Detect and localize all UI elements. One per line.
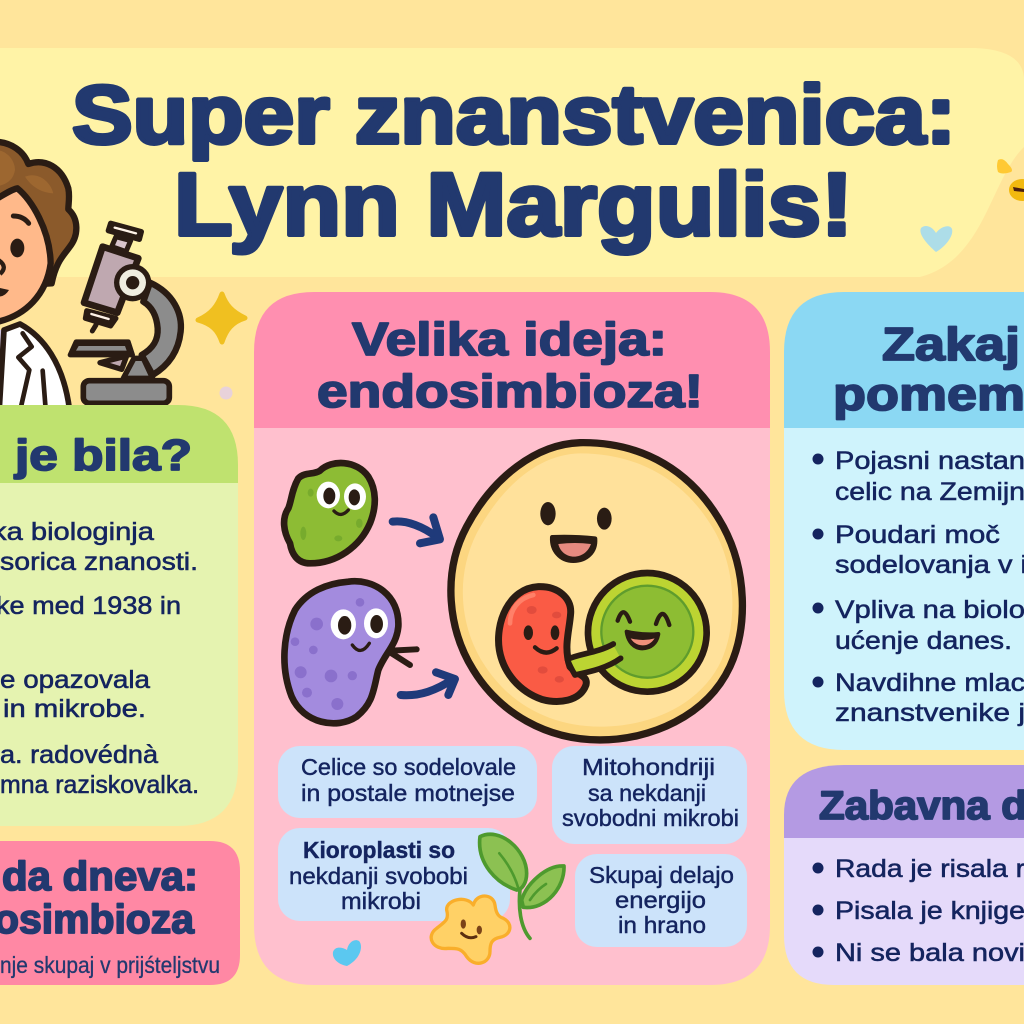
heading (0, 853, 198, 942)
panel header (0, 405, 238, 483)
heading: pomem (833, 368, 1024, 420)
label: mitochondria: svobodni mikrobi (562, 805, 739, 831)
panel body (784, 428, 1024, 750)
label: cooperation (278, 746, 537, 818)
panel header (254, 292, 770, 428)
label: mitochondria (552, 746, 747, 844)
eyepiece neck (112, 237, 131, 252)
organelles inside cell (499, 573, 707, 701)
heading (833, 318, 1024, 420)
heading: osimbioza (0, 896, 195, 942)
label: chloroplasts: mikrobi (341, 888, 421, 914)
facts list: mna raziskovalka. (0, 771, 199, 799)
endosymbiosis diagram (284, 443, 742, 740)
label: chloroplasts (278, 828, 510, 921)
title: Super znanstvenica: (72, 68, 956, 161)
facts list: sorica znanosti. (0, 548, 198, 576)
panel: word of the day (0, 841, 240, 985)
panel: fun facts (784, 765, 1024, 985)
label: energy and food: Skupaj delajo (589, 862, 734, 888)
panel body (254, 428, 770, 985)
fun facts list: Pisala je knjige (835, 897, 1024, 925)
reasons list: Pojasni nastan (835, 447, 1024, 475)
reasons list: znanstvenike j (835, 699, 1024, 727)
icon: blue heart (333, 940, 361, 966)
title (72, 68, 956, 254)
label: chloroplasts: Kioroplasti so (303, 837, 455, 863)
panel header (784, 765, 1024, 838)
purple microbe (284, 581, 417, 723)
facts list (0, 518, 199, 799)
objective lens (85, 311, 116, 326)
heading: Velika ideja: (352, 313, 667, 365)
eye and eyebrow (0, 216, 29, 297)
icon: smiling flower (431, 896, 510, 963)
stage (70, 342, 133, 355)
reasons list: Poudari moč (835, 521, 1000, 549)
lower stage (100, 356, 127, 369)
base (83, 381, 169, 403)
panel: big idea (254, 292, 770, 985)
facts list: a. radovédnà (0, 741, 158, 769)
panel: why important (784, 292, 1024, 750)
arrow: purple microbe into cell (401, 672, 455, 695)
label: mitochondria: Mitohondriji (582, 754, 715, 780)
label: mitochondria: sa nekdanji (588, 780, 706, 806)
facts list: in mikrobe. (3, 695, 146, 723)
facts list: e opazovala (0, 666, 150, 694)
reasons list (812, 447, 1024, 727)
fun facts list (812, 855, 1024, 967)
face (0, 188, 51, 323)
red mitochondrion (499, 587, 586, 701)
scientist illustration (0, 142, 76, 408)
decorative dot (220, 386, 232, 400)
panel body (0, 483, 238, 826)
hair (0, 142, 76, 287)
panel: who was she (0, 405, 238, 826)
label: energy and food: in hrano (618, 912, 706, 938)
heading (317, 313, 703, 417)
green chloroplast (588, 573, 707, 692)
label: chloroplasts: nekdanji svobobi (289, 863, 468, 889)
fun facts list: Rada je risala r (835, 855, 1024, 883)
green microbe (284, 463, 375, 563)
microscope arm (142, 283, 181, 375)
host cell (451, 443, 742, 740)
eyepiece cap (108, 223, 141, 239)
icon: sprout (480, 834, 564, 938)
reasons list: celic na Zemijn (835, 478, 1024, 506)
heading: je bila? (14, 431, 192, 480)
label: energy and food: energijo (615, 887, 706, 913)
reasons list: Vpliva na biolo (835, 596, 1024, 624)
microscope illustration (70, 223, 181, 403)
title banner (0, 48, 1024, 277)
tube (84, 247, 138, 313)
focus knob (114, 264, 151, 301)
fun facts list: Ni se bala novi (835, 939, 1024, 967)
reasons list: ućenje danes. (835, 627, 1012, 655)
label: energy and food (575, 854, 747, 947)
reasons list: Navdihne mlac (835, 669, 1024, 697)
caption: nje skupaj v prijśteljstvu (0, 952, 220, 978)
title: Lynn Margulis! (174, 154, 853, 254)
heading: da dneva: (2, 853, 198, 899)
facts list: ke med 1938 in (0, 592, 181, 620)
heading: Zakaj (882, 318, 1020, 370)
stand (123, 358, 153, 378)
label: cooperation: Celice so sodelovale (301, 754, 516, 780)
icon: small chick at right edge (997, 159, 1024, 201)
arrow: green microbe into cell (393, 517, 440, 543)
label: cooperation: in postale motnejse (301, 780, 515, 806)
coat lapel (18, 333, 45, 408)
lab coat (0, 324, 69, 408)
heading: Zabavna d (819, 784, 1024, 828)
arm linking organelles (567, 644, 621, 675)
panel header (784, 292, 1024, 428)
panel body (784, 838, 1024, 985)
reasons list: sodelovanja v i (835, 551, 1024, 579)
heading: endosimbioza! (317, 365, 703, 417)
icon: yellow sparkle (198, 294, 245, 342)
shirt (0, 330, 3, 357)
icon: pale blue heart (920, 226, 952, 252)
